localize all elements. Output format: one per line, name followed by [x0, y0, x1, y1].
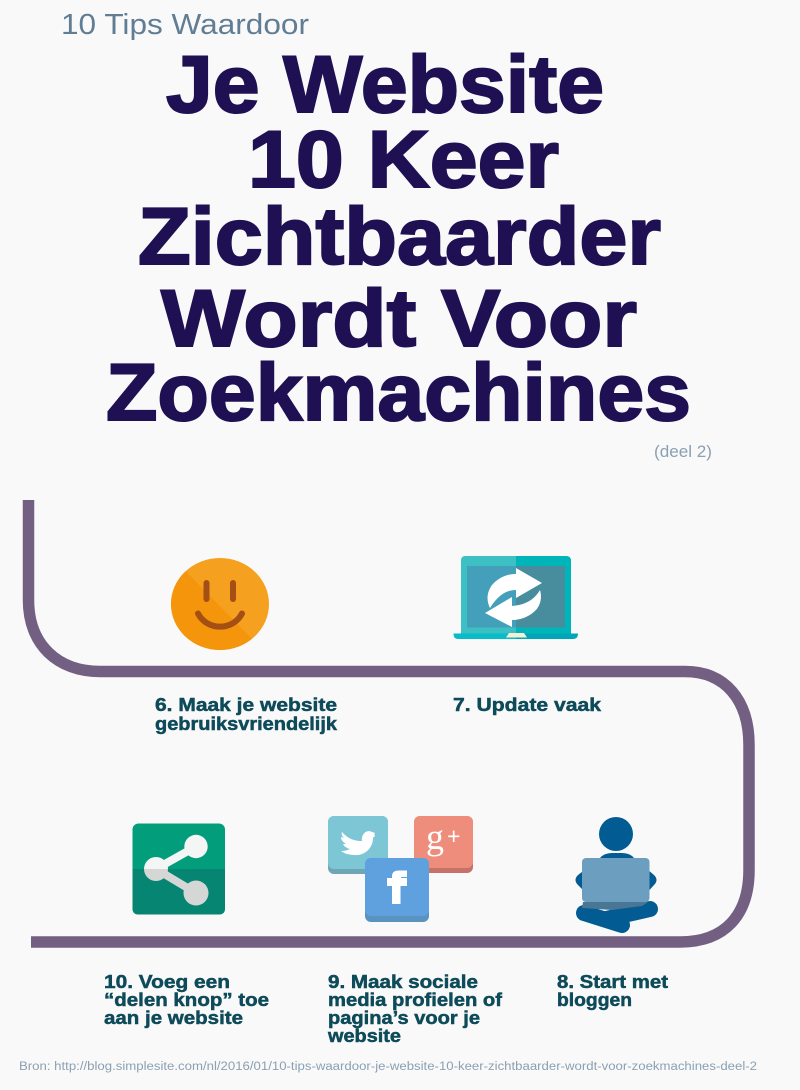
- title: 10 Keer: [248, 115, 559, 205]
- step 9 label: 9. Maak sociale: [328, 971, 478, 992]
- step 10 label: 10. Voeg een: [104, 971, 230, 992]
- icon: social media tiles: [328, 816, 473, 922]
- step 6 label: gebruiksvriendelijk: [155, 713, 338, 734]
- step 10 label: [104, 971, 269, 1028]
- step 10 label: aan je website: [104, 1007, 243, 1028]
- icon: person with laptop: [576, 817, 656, 925]
- timeline path: [28, 500, 749, 942]
- google plus tile: +: [447, 823, 460, 849]
- part label: deel 2: (deel 2): [654, 443, 712, 461]
- step 6 label: 6. Maak je website: [155, 694, 337, 715]
- title: Zichtbaarder: [138, 192, 661, 282]
- title: Zoekmachines: [106, 348, 691, 438]
- step 8 label: 8. Start met: [557, 971, 668, 992]
- subtitle: 10 Tips Waardoor: 10 Tips Waardoor: [61, 9, 309, 41]
- twitter tile: [328, 816, 388, 874]
- icon: share: [132, 824, 225, 914]
- icon: smiley: [171, 558, 269, 650]
- source line: Bron: http://blog.simplesite.com/nl/2016/01/10-tips-waardoor-je-website-10-keer-zichtbaarder-wordt-voor-zoekmachines-deel-2: [19, 1061, 757, 1073]
- step 9 label: website: [327, 1025, 401, 1046]
- title: Wordt Voor: [161, 274, 637, 364]
- step 8 label: bloggen: [557, 989, 632, 1010]
- step 9 label: [327, 971, 503, 1046]
- step 8 label: [557, 971, 668, 1010]
- step 9 label: pagina’s voor je: [328, 1007, 480, 1028]
- google plus tile: [414, 816, 473, 873]
- refresh arrows: [485, 568, 542, 627]
- icon: laptop with refresh arrows: [454, 556, 578, 639]
- title: [106, 40, 691, 438]
- google plus tile: g: [426, 817, 444, 857]
- step 6 label: [155, 694, 338, 734]
- step 9 label: media profielen of: [328, 989, 503, 1010]
- title: Je Website: [166, 40, 604, 130]
- step 10 label: “delen knop” toe: [104, 989, 269, 1010]
- step 7 label: 7. Update vaak: [453, 694, 602, 715]
- facebook tile: [365, 858, 429, 922]
